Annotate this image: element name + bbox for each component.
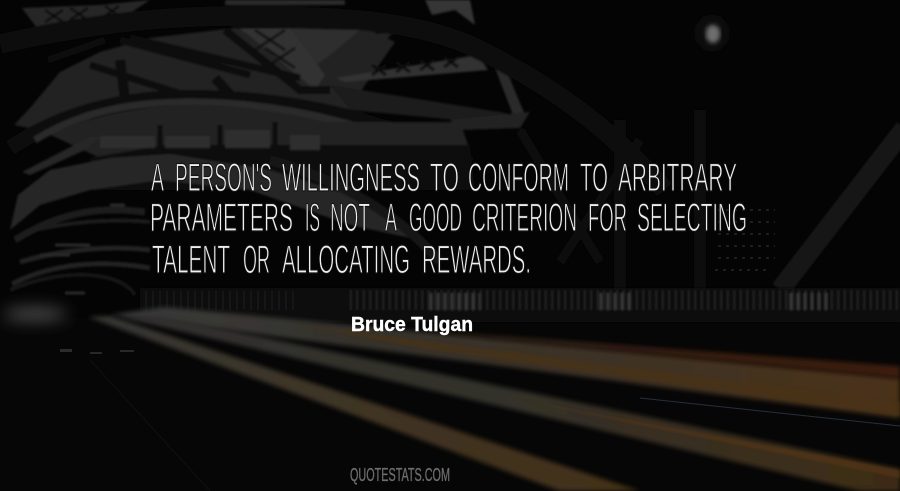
quote line 1: A: [151, 156, 164, 200]
light trails: [3, 307, 900, 491]
author name: Bruce Tulgan: [351, 314, 473, 336]
quote line 2: [150, 196, 747, 240]
quote line 1: ARBITRARY: [618, 156, 737, 200]
quote line 1: WILLINGNESS: [282, 156, 420, 200]
quote line 3: OR: [243, 238, 270, 282]
quote line 1: [151, 156, 737, 200]
text: SELECTING: [637, 196, 747, 240]
quote line 2: A: [385, 196, 397, 240]
quote line 3: TALENT: [152, 238, 230, 282]
quote line 2: GOOD: [409, 196, 462, 240]
quote line 3: ALLOCATING: [282, 238, 410, 282]
quote line 1: TO: [430, 156, 459, 200]
quote line 2: FOR: [588, 196, 627, 240]
quote line 1: TO: [580, 156, 608, 200]
distant building windows: [715, 210, 775, 270]
quote line 2: PARAMETERS: [150, 196, 293, 240]
quote line 3: [152, 238, 531, 282]
quote line 2: CRITERION: [472, 196, 577, 240]
quote text: [150, 156, 747, 282]
bridge arch steelwork: [0, 0, 900, 300]
quote line 1: CONFORM: [468, 156, 569, 200]
watermark: QUOTESTATS.COM: [350, 464, 450, 485]
street lamp: [701, 19, 723, 47]
bridge railing: [140, 288, 900, 322]
quote line 2: IS: [305, 196, 320, 240]
quote line 3: REWARDS.: [422, 238, 531, 282]
quote line 1: PERSON'S: [175, 156, 272, 200]
quote line 2: NOT: [330, 196, 370, 240]
